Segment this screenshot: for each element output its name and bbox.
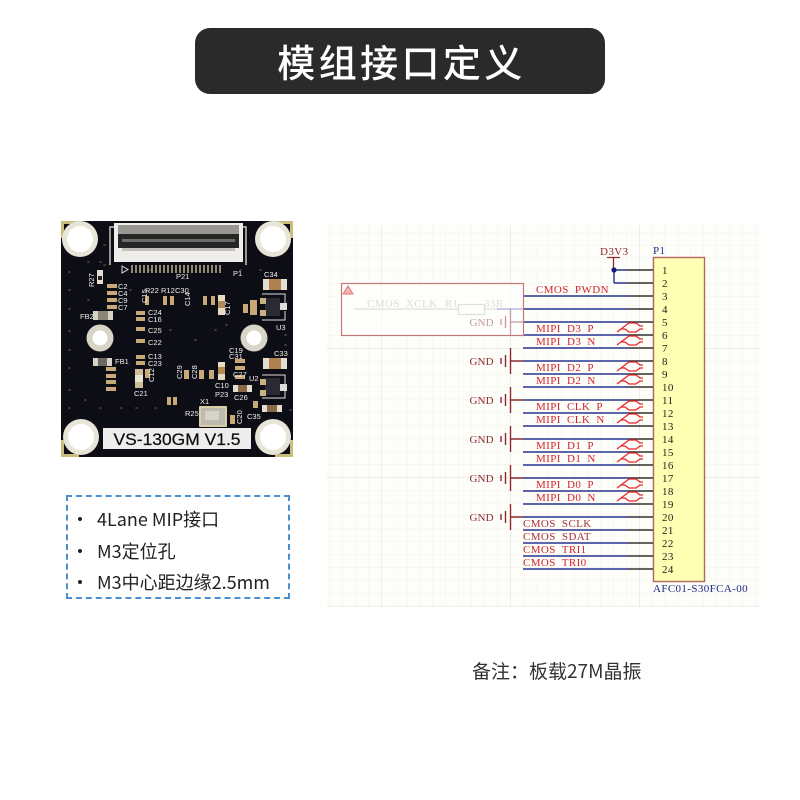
silkscreen labels: C4 — [118, 289, 128, 298]
pin numbers: 1 — [662, 265, 668, 277]
silkscreen labels: C10 — [215, 381, 229, 390]
panel: feature list — [66, 495, 290, 599]
silkscreen labels: R12 — [161, 286, 175, 295]
net labels: I2C: CMOS SCLK — [523, 518, 592, 530]
net labels: CMOS PWDN — [536, 284, 609, 296]
pin numbers: 8 — [662, 356, 668, 368]
faded no-fit region: CMOS XCLK: GND — [470, 317, 494, 329]
pin numbers: 3 — [662, 291, 668, 303]
pin numbers: 12 — [662, 408, 674, 420]
faded no-fit region: CMOS XCLK: CMOS XCLK — [367, 298, 437, 310]
connector designators: P1 — [653, 245, 665, 257]
rotated silkscreen labels: C29 — [175, 365, 184, 379]
net labels: MIPI D3 N — [536, 336, 596, 348]
pin numbers: 6 — [662, 330, 668, 342]
silkscreen labels: C31 — [229, 352, 243, 361]
pin numbers: 15 — [662, 447, 674, 459]
connector designators — [653, 245, 748, 595]
pin numbers: 5 — [662, 317, 668, 329]
pin numbers: 24 — [662, 564, 674, 576]
corner mounting holes — [62, 221, 291, 455]
silkscreen labels: C33 — [274, 349, 288, 358]
silkscreen labels: C26 — [234, 393, 248, 402]
via dots — [69, 245, 291, 410]
regulators U3 and U2 — [260, 294, 287, 398]
pin numbers: 10 — [662, 382, 674, 394]
center locating holes — [86, 324, 268, 352]
net labels: I2C: CMOS SDAT — [523, 531, 591, 543]
net labels: CMOS TRI0 — [523, 557, 587, 569]
silkscreen labels: U3 — [276, 323, 286, 332]
net labels: MIPI D1 N — [536, 453, 596, 465]
silkscreen labels: FB1 — [115, 357, 129, 366]
pin numbers: 19 — [662, 499, 674, 511]
silkscreen labels: X1 — [200, 397, 209, 406]
ferrite beads and large capacitors — [93, 279, 287, 412]
feature: interface: 4Lane MIP接口 — [97, 506, 219, 532]
silkscreen labels: C24 — [148, 308, 162, 317]
pin numbers: 9 — [662, 369, 668, 381]
net labels: MIPI D1 P — [536, 440, 594, 452]
pin numbers: 18 — [662, 486, 674, 498]
silkscreen labels: C13 — [148, 352, 162, 361]
title — [195, 28, 605, 94]
rotated silkscreen labels: C17 — [223, 301, 232, 315]
silkscreen labels: C35 — [247, 412, 261, 421]
silkscreen labels: P21 — [176, 272, 189, 281]
title: 模组接口定义 — [277, 33, 526, 88]
net labels: MIPI D2 N — [536, 375, 596, 387]
net labels: MIPI D0 N — [536, 492, 596, 504]
net labels: I2C — [523, 518, 592, 543]
silkscreen labels: C27 — [233, 370, 247, 379]
small passive components — [97, 270, 258, 424]
faded no-fit region: CMOS XCLK: 33R — [484, 298, 504, 310]
net labels: MIPI CLK P — [536, 401, 603, 413]
silkscreen labels: C22 — [148, 338, 162, 347]
silkscreen labels: P1 — [233, 269, 242, 278]
FPC connector — [110, 223, 246, 273]
pin numbers: 13 — [662, 421, 674, 433]
pin numbers: 7 — [662, 343, 668, 355]
pin numbers: 16 — [662, 460, 674, 472]
ground symbols: GND — [470, 356, 494, 368]
net labels: MIPI D2 P — [536, 362, 594, 374]
corner plating tint — [61, 221, 293, 457]
silkscreen labels: C23 — [148, 359, 162, 368]
net labels: MIPI CLK N — [536, 414, 605, 426]
rotated silkscreen labels: C14 — [183, 292, 192, 306]
rotated silkscreen labels — [87, 273, 244, 424]
net labels — [523, 284, 609, 569]
model label plate: VS-130GM V1.5 — [114, 430, 240, 449]
dark pin stubs — [628, 270, 653, 569]
pin numbers: 21 — [662, 525, 674, 537]
silkscreen labels: C19 — [229, 346, 243, 355]
faded no-fit region: CMOS XCLK — [342, 284, 524, 336]
silkscreen labels: C34 — [264, 270, 278, 279]
feature: locating holes: M3定位孔 — [97, 538, 176, 564]
differential pair markers — [617, 323, 643, 501]
silkscreen labels: C9 — [118, 296, 128, 305]
silkscreen labels: R22 — [145, 286, 159, 295]
ground symbols: GND — [470, 434, 494, 446]
ground symbols: GND — [470, 395, 494, 407]
silkscreen labels: C7 — [118, 303, 128, 312]
pin numbers: 4 — [662, 304, 668, 316]
net labels: CMOS TRI1 — [523, 544, 587, 556]
silkscreen labels: C21 — [134, 389, 148, 398]
ground symbols: GND — [470, 512, 494, 524]
crystal X1 — [199, 406, 227, 427]
rotated silkscreen labels: C12 — [147, 368, 156, 382]
net labels: MIPI D3 P — [536, 323, 594, 335]
silkscreen labels: C2 — [118, 282, 128, 291]
pin numbers: 14 — [662, 434, 674, 446]
board — [61, 221, 293, 457]
ground symbols — [470, 348, 523, 530]
silkscreen labels: C25 — [148, 326, 162, 335]
rotated silkscreen labels: R27 — [87, 273, 96, 287]
pin numbers: 23 — [662, 551, 674, 563]
pin numbers: 2 — [662, 278, 668, 290]
silkscreen labels: U2 — [249, 374, 259, 383]
pin numbers: 22 — [662, 538, 674, 550]
feature: hole distance: M3中心距边缘2.5mm — [97, 569, 270, 595]
faded no-fit region: CMOS XCLK: R1 — [445, 298, 459, 310]
pin numbers: 17 — [662, 473, 674, 485]
power symbol D3V3: D3V3 — [600, 246, 629, 258]
power symbol D3V3 — [600, 246, 629, 273]
connector designators: AFC01-S30FCA-00 — [653, 583, 748, 595]
silkscreen labels: C16 — [148, 315, 162, 324]
rotated silkscreen labels: C20 — [235, 410, 244, 424]
pin numbers: 20 — [662, 512, 674, 524]
rotated silkscreen labels: C15 — [140, 289, 149, 303]
net labels: MIPI D0 P — [536, 479, 594, 491]
silkscreen labels — [80, 269, 288, 421]
silkscreen labels: C30 — [175, 286, 189, 295]
pin numbers — [662, 265, 674, 576]
pin numbers: 11 — [662, 395, 673, 407]
blue net wires — [523, 270, 628, 569]
connector body — [654, 258, 704, 582]
rotated silkscreen labels: C28 — [190, 365, 199, 379]
note: 备注：板载27M晶振 — [472, 657, 642, 684]
silkscreen labels: R25 — [185, 409, 199, 418]
ground symbols: GND — [470, 473, 494, 485]
silkscreen labels: P23 — [215, 390, 228, 399]
silkscreen labels: FB2 — [80, 312, 94, 321]
